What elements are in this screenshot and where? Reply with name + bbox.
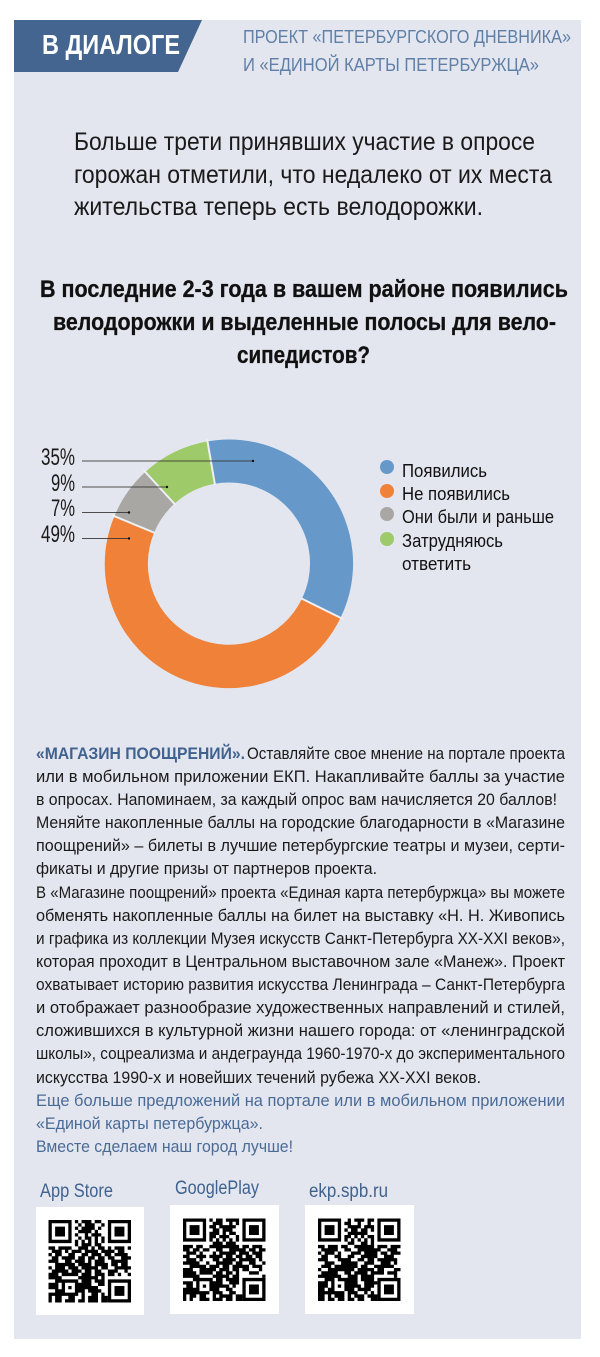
percent labels with leader lines: 35%: [41, 444, 75, 471]
call to action text: [36, 1091, 565, 1156]
banner: В диалоге: [14, 20, 202, 72]
body text: loyalty shop: и отображает разнообразие художественных направлений и стилей,: [36, 998, 565, 1017]
segment: Не появились 49%: [105, 516, 341, 688]
QR block: GooglePlay: [170, 1178, 279, 1314]
legend: ответить: [402, 554, 471, 574]
body text: loyalty shop: «МАГАЗИН ПООЩРЕНИЙ».: [36, 744, 245, 763]
call to action text: Вместе сделаем наш город лучше!: [36, 1137, 293, 1156]
lead text: горожан отметили, что недалеко от их места: [74, 161, 552, 189]
body text: loyalty shop: Оставляйте свое мнение на портале проекта: [247, 744, 565, 763]
QR block: ekp.spb.ru: [305, 1181, 414, 1314]
body text: loyalty shop: обменять накопленные баллы на билет на выставку «Н. Н. Живопись: [36, 906, 565, 925]
legend: Затрудняюсь: [402, 531, 503, 551]
QR block: GooglePlay: GooglePlay: [175, 1178, 259, 1199]
donut chart: [105, 438, 353, 688]
heading: survey question: [40, 276, 568, 369]
legend: Они были и раньше: [402, 507, 554, 527]
call to action text: Еще больше предложений на портале или в мобильном приложении: [36, 1091, 565, 1110]
legend: Появились: [402, 461, 487, 481]
segment: Они были и раньше 7%: [114, 472, 174, 533]
body text: loyalty shop: Меняйте накопленные баллы на городские благодарности в «Магазине: [36, 813, 565, 832]
lead text: Больше трети принявших участие в опросе: [74, 128, 535, 156]
subtitle: project name: ПРОЕКТ «ПЕТЕРБУРГСКОГО ДНЕВНИКА»: [243, 27, 571, 47]
percent labels with leader lines: [41, 444, 254, 548]
body text: loyalty shop: поощрений» – билеты в лучшие петербургские театры и музеи, серти-: [36, 836, 565, 855]
lead text: жительства теперь есть велодорожки.: [74, 193, 483, 221]
banner: В диалоге: В ДИАЛОГЕ: [42, 29, 180, 60]
body text: loyalty shop: в опросах. Напоминаем, за каждый опрос вам начисляется 20 баллов!: [36, 790, 557, 809]
body text: loyalty shop: фикаты и другие призы от партнеров проекта.: [36, 859, 377, 878]
call to action text: «Единой карты петербуржца».: [36, 1114, 263, 1133]
subtitle: project name: [243, 27, 571, 75]
body text: loyalty shop: охватывает историю развития искусства Ленинграда – Санкт-Петербурга: [36, 975, 565, 994]
percent labels with leader lines: 49%: [41, 521, 75, 548]
body text: loyalty shop: [36, 744, 565, 1087]
lead text: [74, 128, 552, 221]
legend: [380, 460, 554, 574]
heading: survey question: сипедистов?: [237, 342, 370, 369]
legend: Не появились: [402, 484, 510, 504]
subtitle: project name: И «ЕДИНОЙ КАРТЫ ПЕТЕРБУРЖЦА»: [243, 54, 539, 75]
QR block: ekp.spb.ru: ekp.spb.ru: [309, 1181, 388, 1202]
percent labels with leader lines: 9%: [51, 470, 75, 497]
body text: loyalty shop: или в мобильном приложении ЕКП. Накапливайте баллы за участие: [36, 767, 565, 786]
body text: loyalty shop: искусства 1990-х и новейших течений рубежа XX-XXI веков.: [36, 1068, 481, 1087]
segment: Затрудняюсь ответить 9%: [145, 441, 215, 504]
segment: Появились 35%: [208, 440, 353, 618]
percent labels with leader lines: 7%: [51, 495, 75, 522]
body text: loyalty shop: которая проходит в Центральном выставочном зале «Манеж». Проект: [36, 952, 565, 971]
QR block: App Store: [36, 1181, 144, 1315]
body text: loyalty shop: сложившихся в культурной жизни нашего города: от «ленинградской: [36, 1021, 565, 1040]
QR block: App Store: App Store: [40, 1181, 113, 1202]
